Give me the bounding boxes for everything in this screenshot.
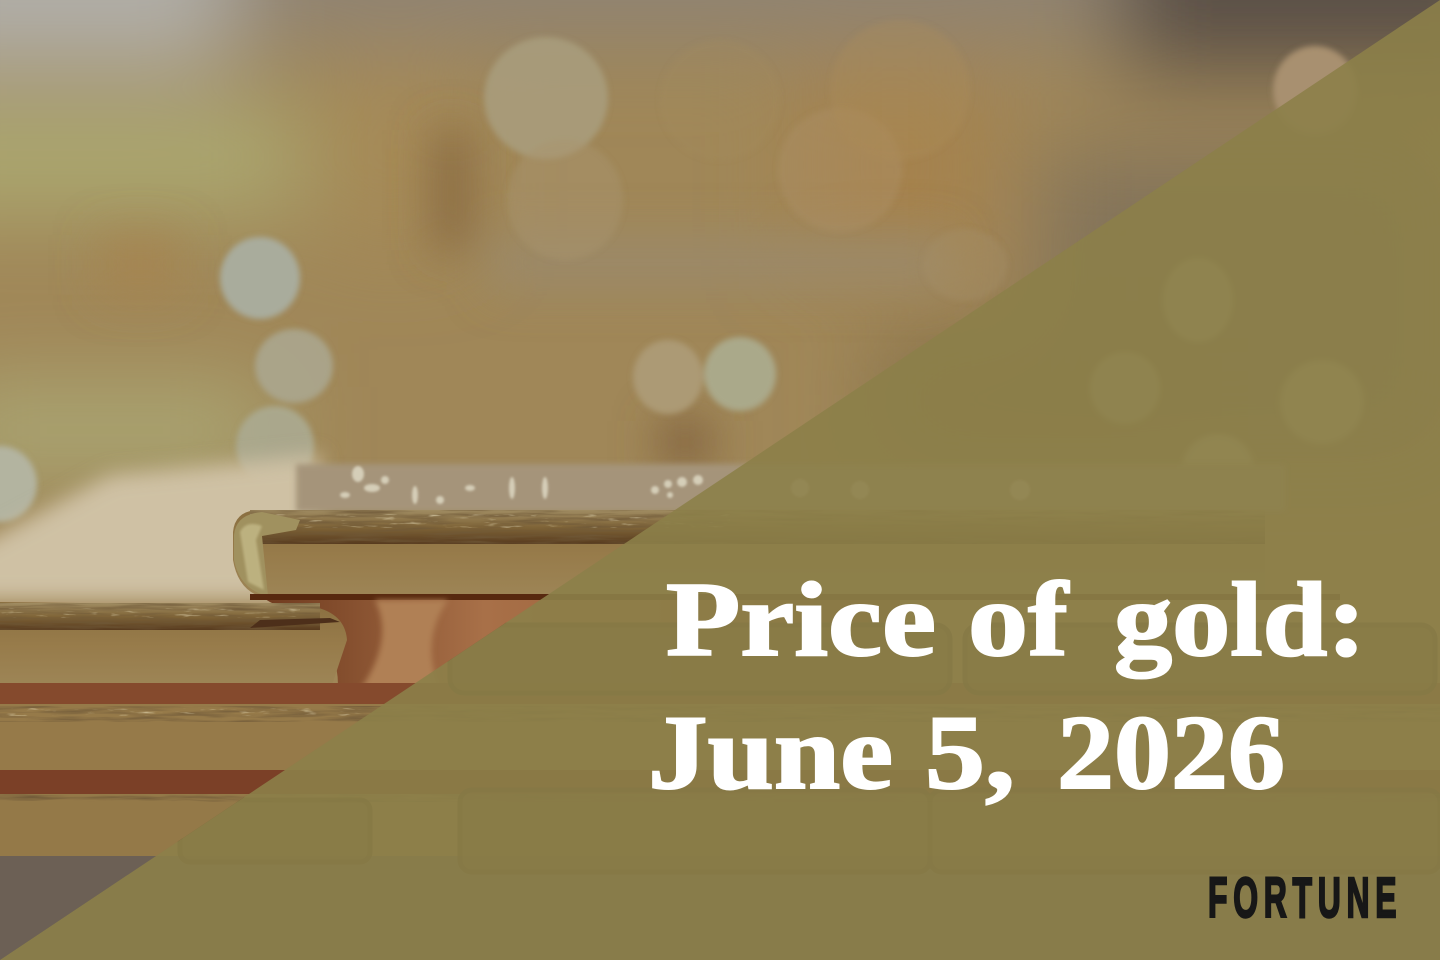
second bar xyxy=(0,602,347,671)
title line 2: June xyxy=(648,694,893,811)
top bar xyxy=(233,511,624,594)
title line 2 continued: 2026 xyxy=(1057,694,1285,811)
title line 1: Price xyxy=(666,561,936,678)
bokeh highlights xyxy=(0,20,1364,522)
title xyxy=(652,579,1357,806)
white table surface xyxy=(0,455,320,600)
title line 2 continued: 5, xyxy=(925,694,1015,811)
Fortune wordmark: FORTUNE xyxy=(1208,865,1402,929)
copper gap xyxy=(233,511,540,683)
title line 1 continued: of xyxy=(968,561,1070,678)
title line 1 continued: gold: xyxy=(1114,561,1366,678)
fourth bar xyxy=(0,794,248,856)
top bar upper surface xyxy=(294,462,746,510)
gold bars seen through the overlay xyxy=(178,622,506,842)
third bar xyxy=(0,704,384,770)
gold bar stack xyxy=(0,464,1440,960)
